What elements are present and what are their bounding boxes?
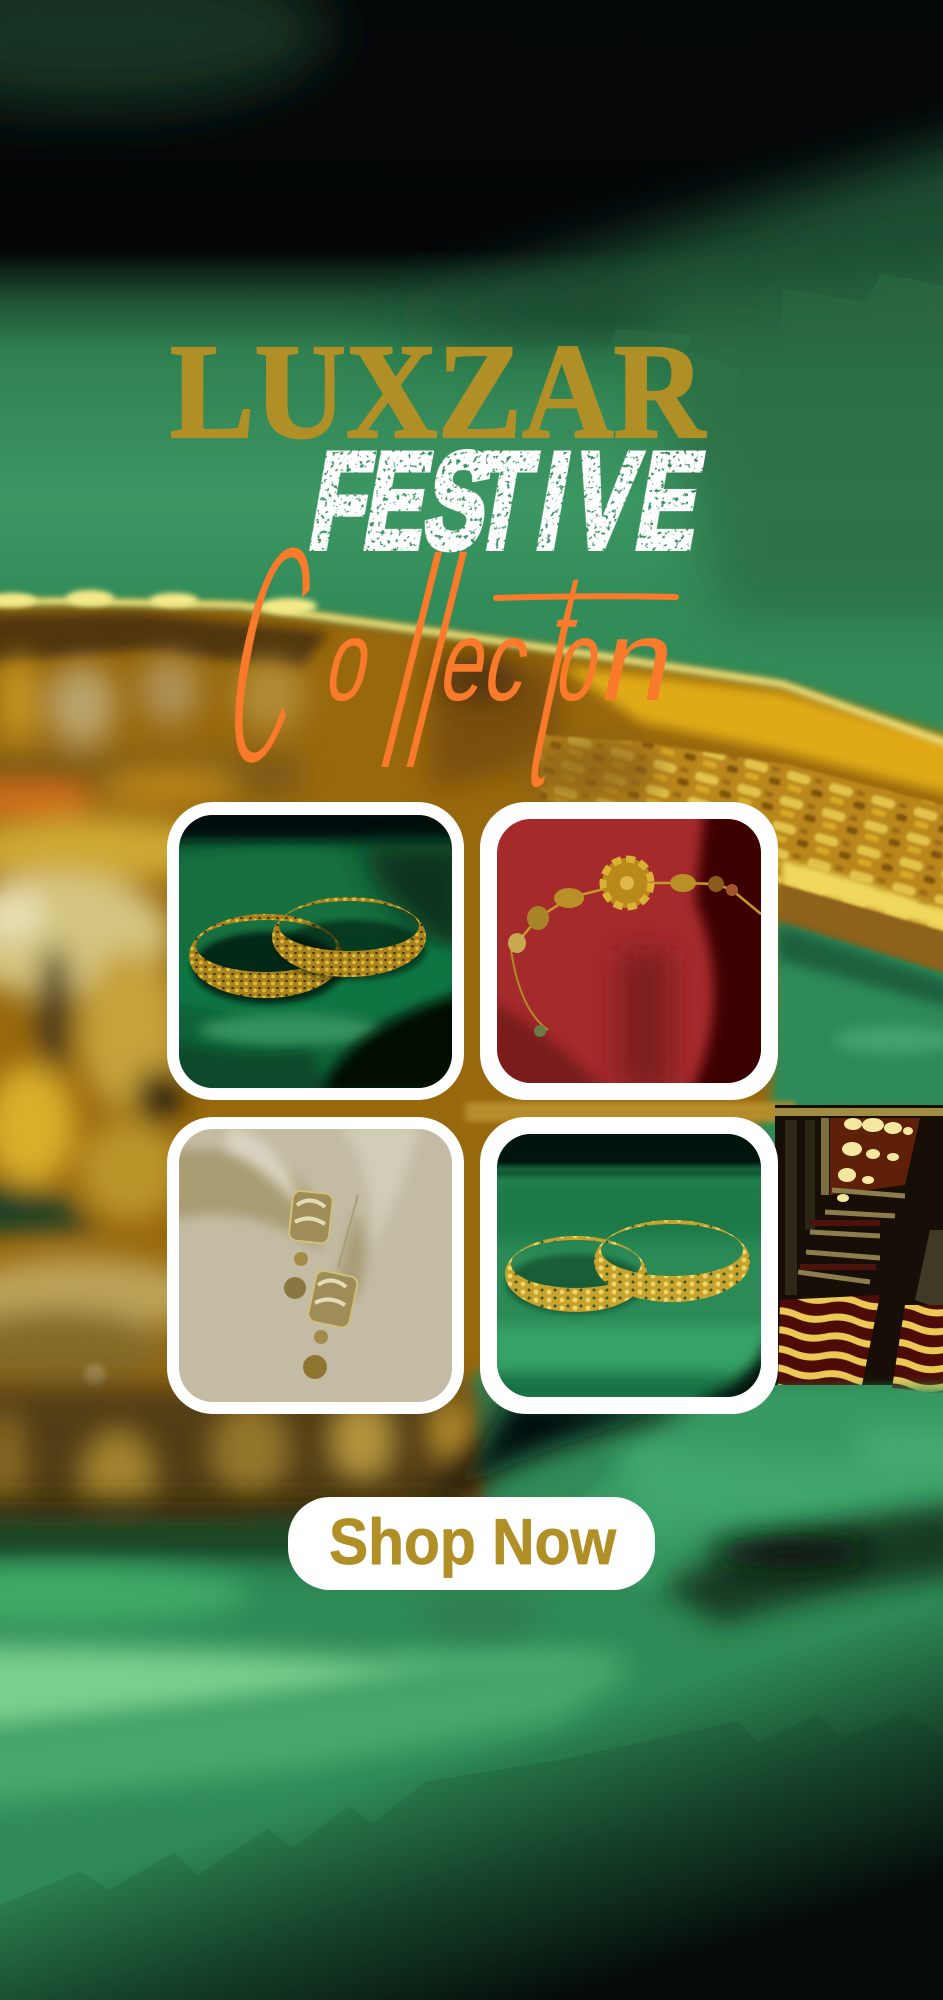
dark green glow top left xyxy=(0,0,330,110)
dark shoulder top right xyxy=(380,120,943,340)
bangle left xyxy=(192,932,344,1004)
lit cloth sweep xyxy=(0,1567,250,1623)
card: green cloth bangles xyxy=(480,1117,778,1414)
title: Collecton script: o xyxy=(547,596,614,725)
underside of band xyxy=(780,884,943,978)
button: Shop Now xyxy=(288,1497,655,1590)
title: Collecton script: t xyxy=(505,486,607,865)
title: Collecton script: C xyxy=(202,474,338,837)
title: Collecton script xyxy=(202,474,688,865)
left soft blobs xyxy=(0,655,306,1390)
title: Collecton script: n xyxy=(591,596,688,725)
earring top xyxy=(288,1190,333,1244)
title: Collecton script: c xyxy=(475,597,542,725)
bangle left xyxy=(506,1254,646,1314)
title: FESTIVE: FESTIVE xyxy=(301,425,714,577)
dark cloth shadows xyxy=(420,1395,700,1510)
earring bottom xyxy=(307,1269,359,1329)
green cloth under bangle right xyxy=(778,922,943,1120)
upper dark inner band xyxy=(0,612,330,668)
bottom darkening xyxy=(0,1500,943,2000)
right bangle: middle brown xyxy=(430,650,560,790)
jewelled bangle section right xyxy=(465,1102,795,1122)
flower pendant xyxy=(602,858,652,908)
bangle right xyxy=(278,920,426,980)
card: red fabric bracelet xyxy=(480,802,778,1100)
bright rim of bangle xyxy=(0,601,943,748)
card: cream earrings xyxy=(167,1117,464,1414)
card: green bangles xyxy=(167,802,470,1100)
title: Collecton script: e xyxy=(431,597,501,725)
gold texture on right bangle xyxy=(540,735,943,950)
bangle right xyxy=(594,1220,750,1302)
t crossbar flourish xyxy=(496,596,676,598)
title: Collecton script: l xyxy=(385,499,486,831)
title: Collecton script: l xyxy=(360,499,461,831)
title: Collecton script: o xyxy=(317,596,384,725)
green lower cloth xyxy=(0,1525,943,1800)
button: Shop Now: Shop Now xyxy=(329,1505,616,1578)
lower brown bokeh band xyxy=(0,1385,480,1532)
title: LUXZAR: LUXZAR xyxy=(170,317,707,467)
chain xyxy=(511,950,548,1030)
gold bangle mass xyxy=(0,602,943,1520)
bright lower strip of band xyxy=(782,860,943,945)
jagged ridge bottom xyxy=(0,1712,943,2000)
